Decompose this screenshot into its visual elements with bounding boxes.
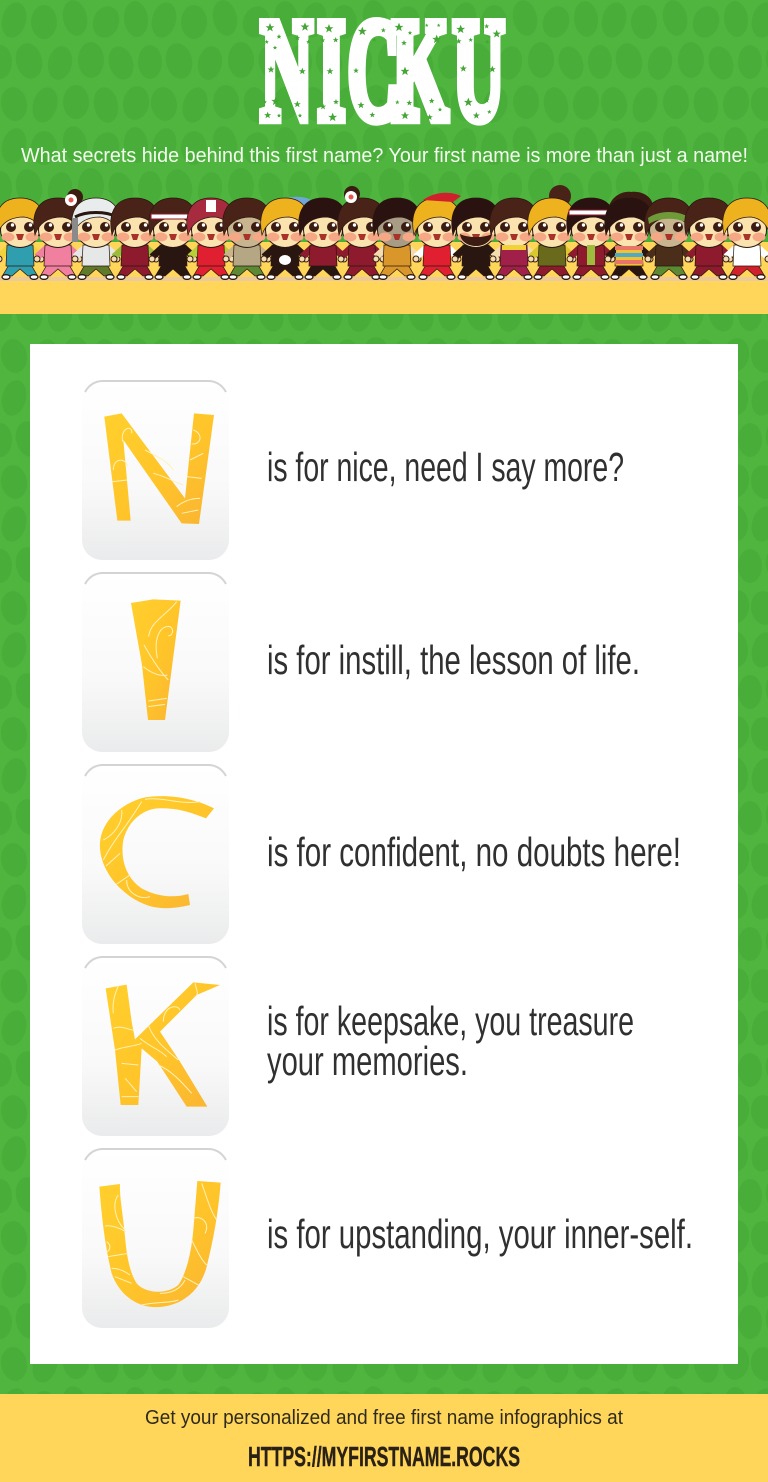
footer URL: HTTPS://MYFIRSTNAME.ROCKS: [248, 1441, 520, 1472]
footer band: [0, 1394, 768, 1482]
character: girl in green and maroon: [111, 198, 159, 279]
character: blond boy in olive vest: [528, 185, 576, 279]
text: N meaning: is for nice, need I say more?: [267, 444, 624, 490]
character: blond boy in teal overalls: [0, 198, 44, 279]
tile: letter N: [82, 381, 229, 560]
subtitle: What secrets hide behind this first name? Your first name is more than just a name!: [21, 144, 748, 167]
character: blond girl in white and red: [723, 198, 768, 279]
character: girl with flower in maroon: [338, 186, 386, 279]
panel: name letters: [30, 344, 738, 1364]
character: girl in pink kimono: [34, 189, 83, 279]
character: blond girl in red dress: [413, 193, 461, 279]
yellow banner with parade of characters: [0, 185, 768, 314]
character: girl in tan with grass skirt: [223, 198, 271, 279]
row: letter C: [82, 765, 681, 944]
character: girl in dotted maroon skirt: [490, 198, 538, 279]
tile: letter I: [82, 573, 229, 752]
row: letter U: [82, 1149, 693, 1328]
tile: letter K: [82, 957, 229, 1136]
character: boy in orange tiger skin: [373, 198, 421, 279]
text: K meaning: your memories.: [267, 1038, 468, 1084]
row: letter I: [82, 573, 640, 752]
tile: letter C: [82, 765, 229, 944]
character: tribal boy in black: [149, 198, 197, 279]
character: bearded man in dark brown: [452, 198, 500, 279]
text: K meaning: [267, 998, 634, 1084]
row: letter K: [82, 957, 634, 1136]
character: tribal girl in maroon and green: [567, 198, 615, 279]
character: girl in striped rainbow top: [605, 192, 654, 279]
character: boy in maroon robe: [685, 198, 733, 279]
row: letter N: [82, 381, 624, 560]
character: blond boy with blue hat: [261, 197, 311, 279]
character: girl with red hat and skirt: [187, 198, 235, 279]
character: dark-haired girl in maroon: [299, 198, 347, 279]
character: girl with green headband and grass skirt: [645, 198, 693, 279]
character: man in white headdress: [72, 198, 120, 279]
footer text: Get your personalized and free first name infographics at: [145, 1407, 623, 1429]
tile: letter U: [82, 1149, 229, 1328]
